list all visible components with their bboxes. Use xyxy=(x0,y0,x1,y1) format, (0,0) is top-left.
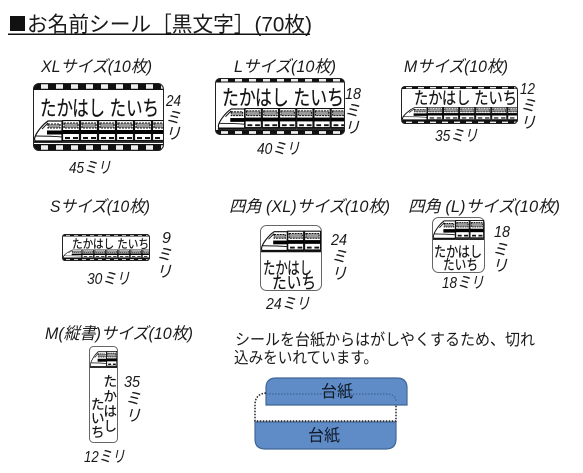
dimension: M vertical width: 12ミリ xyxy=(84,449,125,466)
dimension: M width: 35ミリ xyxy=(435,128,478,145)
dimension: square L width: 18ミリ xyxy=(442,275,484,292)
dimension: M height: 12 xyxy=(520,81,535,98)
sticker: XL: たかはし たいち xyxy=(40,98,159,120)
dimension: L height: 18 xyxy=(345,86,361,103)
title: お名前シール［黒文字］(70枚) xyxy=(27,14,312,36)
dimension: XL height: 24 xyxy=(165,93,181,110)
label: top backing paper: 台紙 xyxy=(321,382,353,401)
dimension: S height: ミ xyxy=(156,247,172,264)
dimension: XL height: ミ xyxy=(165,110,181,127)
dimension: square XL width: 24ミリ xyxy=(265,296,310,313)
dimension: square XL height: 24 xyxy=(330,232,347,249)
sticker: L xyxy=(215,78,345,135)
sticker: M vertical: い xyxy=(91,411,104,426)
text block: note about slits xyxy=(234,331,535,367)
dimension: L height: リ xyxy=(344,120,360,137)
heading: M vertical: M(縦書)サイズ(10枚) xyxy=(45,324,193,343)
dimension: M height: ミ xyxy=(520,98,536,115)
sticker: L: たかはし たいち xyxy=(222,87,344,110)
dimension: XL height xyxy=(165,93,181,143)
dimension: M height: リ xyxy=(520,115,536,132)
sticker: square XL xyxy=(260,226,405,292)
top backing paper xyxy=(266,378,407,405)
sticker: M vertical: か xyxy=(104,389,118,404)
dimension: S height: リ xyxy=(156,264,172,281)
dotted sticker outline xyxy=(255,393,396,421)
diagram: backing paper with slit xyxy=(255,378,407,449)
heading: XL size: XLサイズ(10枚) xyxy=(40,57,152,76)
text block: note about slits: 込みをいれています。 xyxy=(234,349,378,367)
dimension: M vertical height: 35 xyxy=(124,374,140,391)
panel: XL size xyxy=(33,57,188,177)
panel: L size xyxy=(215,57,365,158)
dimension: square L height xyxy=(492,224,510,275)
sticker: M vertical: は xyxy=(104,404,117,419)
sticker: M: たかはし たいち xyxy=(414,89,517,108)
panel: square XL size xyxy=(229,197,405,313)
dimension: M vertical height: ミ xyxy=(125,391,141,408)
dimension: M vertical height xyxy=(124,374,141,425)
sticker: square L xyxy=(432,218,556,274)
dimension: square XL height xyxy=(330,232,347,283)
sticker: square L: たかはし xyxy=(434,244,482,261)
sticker: M vertical: ち xyxy=(91,425,104,440)
dimension: M height xyxy=(520,81,536,132)
label: bottom backing paper: 台紙 xyxy=(308,426,340,445)
dimension: L height: ミ xyxy=(344,103,360,120)
panel: S size xyxy=(50,197,172,288)
heading: square L: 四角 (L)サイズ(10枚) xyxy=(408,197,560,216)
dimension: XL height: リ xyxy=(165,126,181,143)
dimension: S width: 30ミリ xyxy=(87,271,130,288)
sticker: square XL: たいち xyxy=(272,274,316,292)
panel: square L size xyxy=(408,197,560,292)
sticker: M vertical: た xyxy=(104,374,117,389)
text block: note about slits: シールを台紙からはがしやくするため、切れ xyxy=(235,331,535,349)
dimension: square L height: ミ xyxy=(492,242,508,259)
dimension: square L height: リ xyxy=(492,258,508,275)
sticker: M vertical: し xyxy=(104,419,117,434)
heading: square XL: 四角 (XL)サイズ(10枚) xyxy=(229,197,390,216)
sticker: S: たかはし たいち xyxy=(72,237,149,251)
dimension: L width: 40ミリ xyxy=(257,141,300,158)
sticker: XL xyxy=(33,83,164,151)
sticker: square XL: たかはし xyxy=(263,259,312,278)
dimension: XL width: 45ミリ xyxy=(69,160,111,177)
bottom backing paper xyxy=(255,422,396,449)
dimension: L height xyxy=(344,86,361,137)
heading: S size: Sサイズ(10枚) xyxy=(50,197,150,216)
sticker: M vertical xyxy=(90,346,180,442)
dotted outline over paper xyxy=(266,394,396,402)
heading: L size: Lサイズ(10枚) xyxy=(234,57,336,76)
dimension: M vertical height: リ xyxy=(125,408,141,425)
dimension: square XL height: ミ xyxy=(331,249,347,266)
dimension: square L height: 18 xyxy=(494,224,510,241)
panel: M size xyxy=(401,57,539,145)
dimension: square XL height: リ xyxy=(331,266,347,283)
sticker: square L: たいち xyxy=(443,257,478,274)
panel: M vertical size xyxy=(45,324,193,466)
dimension: S height xyxy=(156,230,172,281)
heading: M size: Mサイズ(10枚) xyxy=(404,57,508,76)
sticker: M vertical: た xyxy=(91,397,104,412)
dimension: S height: 9 xyxy=(162,230,171,247)
